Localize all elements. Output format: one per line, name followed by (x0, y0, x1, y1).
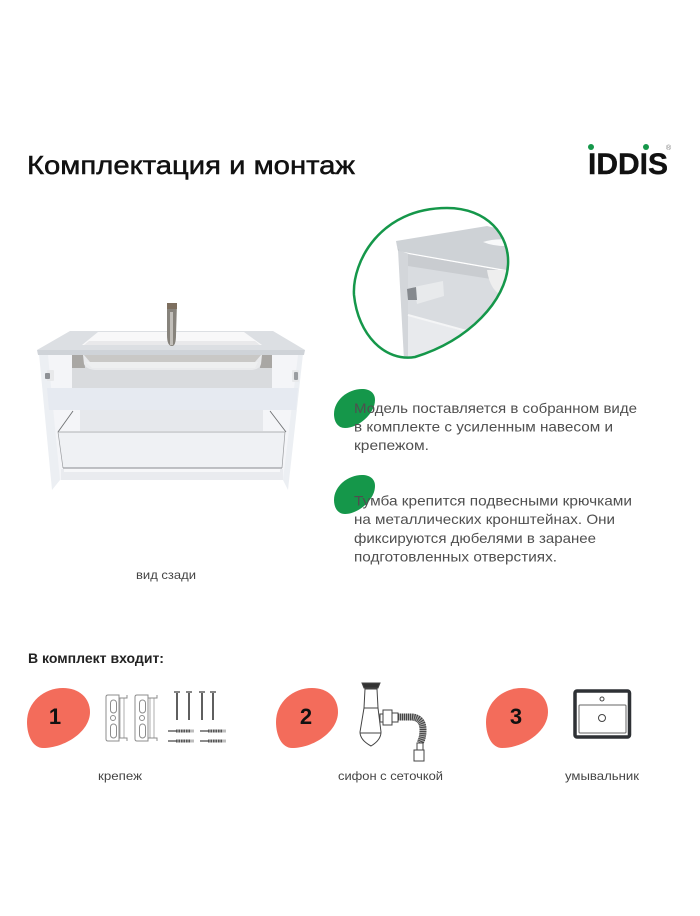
drawer (58, 432, 285, 468)
item 1 label: крепеж (98, 769, 142, 783)
bracket (414, 281, 444, 304)
title: Комплектация и монтаж (27, 150, 356, 180)
icon: washbasin (575, 691, 630, 737)
basin (82, 332, 262, 345)
drawer runners (58, 411, 286, 432)
counter top (37, 331, 305, 350)
inner wall (409, 254, 498, 332)
logo: IDDIS: ® (666, 144, 672, 152)
logo: IDDIS: IDDIS (588, 148, 668, 181)
item 3 label: умывальник (565, 769, 640, 783)
text block: mounting: Тумба крепится подвесными крючками (354, 492, 632, 508)
item 1 badge (27, 688, 90, 748)
text block: assembled delivery (354, 400, 637, 453)
item 1 badge: 1 (49, 704, 61, 729)
text block: assembled delivery: в комплекте с усиленным навесом и (354, 418, 613, 434)
lower compartment back (80, 410, 263, 431)
item 3 badge: 3 (510, 704, 522, 729)
cabinet side panels (39, 354, 303, 490)
text block: assembled delivery: крепежом. (354, 437, 429, 453)
heading: kit contents: В комплект входит: (28, 650, 164, 666)
detail view: green circle (354, 208, 512, 360)
side panel (398, 250, 409, 360)
caption: rear view: вид сзади (136, 568, 196, 582)
bullet: green blob 2 (334, 475, 375, 514)
lower panel (408, 316, 464, 356)
item 2 badge (276, 688, 338, 748)
dowels (176, 731, 226, 741)
product image: vanity unit rear view (37, 303, 305, 490)
upper recess back (72, 355, 272, 388)
item 3 badge (486, 688, 548, 748)
item 2 label: сифон с сеточкой (338, 769, 443, 783)
hanging brackets (45, 370, 299, 382)
item 2 badge: 2 (300, 704, 312, 729)
text block: assembled delivery: Модель поставляется в собранном виде (354, 400, 637, 416)
counter top (396, 226, 512, 271)
text block: mounting: фиксируются дюбелями в заранее (354, 530, 596, 546)
rail (47, 388, 298, 410)
text block: mounting: подготовленных отверстиях. (354, 548, 557, 564)
text block: mounting: на металлических кронштейнах. Они (354, 511, 615, 527)
icon: siphon (360, 683, 424, 761)
basin underside (83, 355, 262, 370)
icon: mounting hardware (106, 692, 226, 741)
screws (174, 692, 216, 720)
bottom panel (61, 469, 283, 480)
text block: mounting (354, 492, 632, 564)
interior (48, 355, 298, 480)
corrugated hose (398, 717, 423, 743)
faucet (167, 303, 177, 346)
bullet: green blob 1 (334, 389, 375, 428)
basin curve (487, 270, 506, 293)
